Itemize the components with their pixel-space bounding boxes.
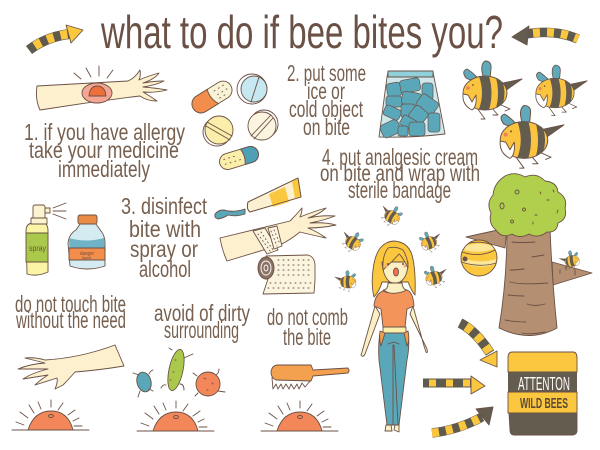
arrow: top left [29, 25, 83, 50]
sign: attention wild bees [508, 352, 577, 435]
text: step 2: on bite [303, 114, 350, 140]
text: step 1: immediately [58, 156, 150, 182]
icon: arm with bee bite [36, 66, 167, 110]
icon: spray bottle [26, 203, 66, 275]
icon: medicine jar [68, 215, 105, 269]
text: avoid dirty surrounding: surrounding [164, 317, 239, 343]
icon: ice bag [379, 71, 445, 139]
text: step 2 [287, 60, 366, 140]
text: step 3: 3. disinfect [121, 193, 207, 219]
arrow: down-right to sign [460, 323, 497, 367]
icon: bandage roll [258, 255, 315, 294]
icon: medicine jar: danger [80, 251, 94, 257]
text: do not comb: the bite [283, 324, 331, 350]
arrow: right to sign [423, 376, 485, 394]
arrow: top right [512, 26, 578, 45]
text: step 1: take your medicine [29, 137, 179, 163]
text: step 3: spray or [130, 236, 198, 262]
text: step 2: cold object [289, 96, 363, 122]
text: do not comb: do not comb [267, 304, 348, 330]
icon: hand [18, 345, 124, 389]
icon: cream tube [215, 178, 301, 219]
text: step 2: ice or [307, 78, 345, 104]
text: do not comb [267, 304, 348, 350]
illustration: woman [361, 241, 427, 432]
text: step 1 [24, 119, 185, 182]
text: do not touch bite: without the need [15, 307, 126, 333]
icon: bandaged arm [220, 208, 336, 261]
text: step 4: sterile bandage [348, 177, 451, 203]
text: step 3 [121, 193, 207, 282]
icon: hairbrush [271, 365, 349, 389]
text: step 4: 4. put analgesic cream [322, 144, 478, 170]
icon: germs [133, 348, 225, 397]
icon: small bees [335, 200, 450, 291]
illustration: tree with hive [461, 174, 592, 336]
text: do not touch bite [15, 291, 126, 333]
text: step 1: 1. if you have allergy [24, 119, 185, 145]
icon: medicine jar: liquid [82, 255, 91, 260]
icon: large bees [463, 61, 587, 168]
icon: pills [189, 74, 278, 171]
icons: suns [12, 400, 338, 431]
icon: spray bottle: spray [29, 244, 46, 253]
text: step 3: bite with [129, 216, 201, 242]
text: do not touch bite: do not touch bite [15, 291, 126, 317]
text: step 4 [320, 144, 480, 203]
text: step 3: alcohol [139, 256, 191, 282]
text: avoid dirty surrounding [154, 300, 250, 343]
text: step 2: 2. put some [287, 60, 366, 86]
arrow: up-right to sign [432, 407, 493, 433]
text: step 4: on bite and wrap with [320, 160, 480, 186]
text: avoid dirty surrounding: avoid of dirty [154, 300, 250, 326]
